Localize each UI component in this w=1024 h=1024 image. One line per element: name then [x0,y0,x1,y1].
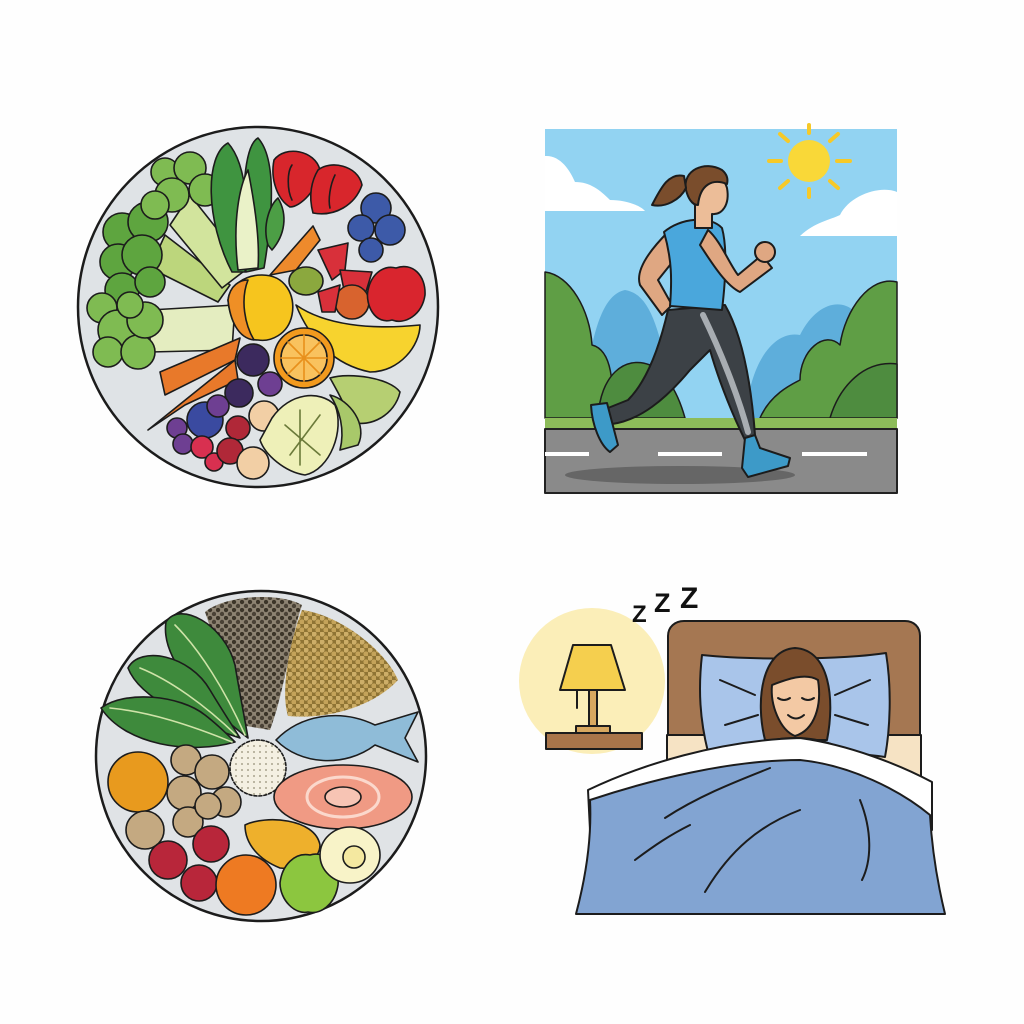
legs [608,305,755,440]
strawberries and kiwi [289,243,372,319]
pale fruit balls [249,401,279,431]
back arm [639,232,678,315]
bok choy leaves [211,138,284,272]
carrots [160,338,240,395]
panel: plate of protein and whole grains [96,591,426,921]
sleep letters: Z [680,582,698,615]
clouds [545,156,645,211]
walnuts [126,745,241,849]
spinach leaves [101,614,248,747]
yellow bell pepper [228,275,293,340]
lamp glow [519,608,665,754]
sun [769,125,850,197]
sleep letters [632,582,698,628]
hair [761,648,830,740]
grass [545,418,897,430]
shadow [565,466,795,484]
distant blue trees [580,290,680,420]
panel: jogger in park [545,125,897,493]
shoes [591,403,618,452]
sky [545,129,897,429]
red peppers [273,151,362,214]
blanket folds [635,768,869,892]
rice ball [230,740,286,796]
road marks [545,452,867,456]
orange [216,855,276,915]
dark berries [167,344,282,471]
road [545,429,897,493]
mango and peach [245,820,320,868]
small carrot [270,226,320,275]
head [687,172,728,228]
banana [296,305,420,372]
egg [320,827,380,883]
tan grains [285,610,398,717]
pillow [700,653,890,757]
cucumber and melon [330,376,400,423]
torso [664,220,725,310]
apple [367,267,425,321]
panel: person sleeping [519,582,945,914]
runner [591,166,790,477]
icon: table lamp [546,645,642,749]
green apple [280,854,338,913]
plate [96,591,426,921]
sleep letters: Z [632,601,647,628]
raspberries [149,826,229,901]
headboard [668,621,920,740]
green bushes [545,272,897,418]
face [772,677,819,736]
fish [276,712,418,762]
sleep letters: Z [654,588,670,618]
panel: plate of vegetables and fruit [78,127,438,487]
white sheet [588,738,932,830]
orange slice [274,328,334,388]
mattress back [667,735,921,785]
broccoli and stems [87,152,248,369]
blanket [576,760,945,914]
hair [686,166,727,205]
front arm [700,230,772,292]
plate [78,127,438,487]
dark lentils [205,597,302,730]
shoulders [735,738,858,765]
nightstand [546,733,642,749]
salmon [274,765,412,829]
orange bowl [108,752,168,812]
blueberries [348,193,405,262]
